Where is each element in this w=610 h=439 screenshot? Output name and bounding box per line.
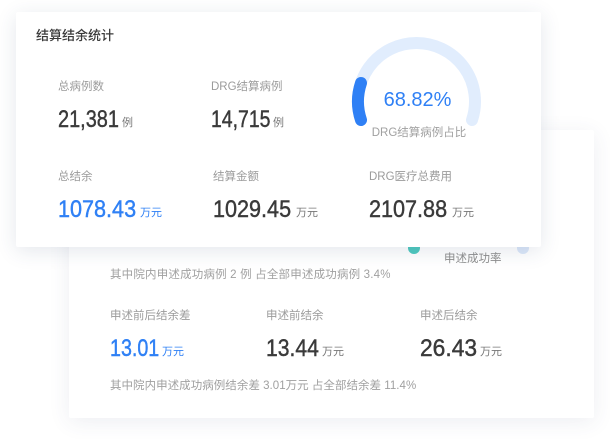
value: 21,381 bbox=[58, 106, 119, 133]
value: 13.44 bbox=[266, 335, 319, 362]
metric: total balance bbox=[58, 170, 162, 223]
unit: 万元 bbox=[322, 346, 344, 358]
metric: total DRG medical cost bbox=[369, 170, 474, 223]
unit: 万元 bbox=[480, 346, 502, 358]
label: 申述后结余 bbox=[420, 310, 478, 322]
label: 申述前结余 bbox=[266, 310, 324, 322]
label: 总病例数 bbox=[58, 81, 104, 93]
label: appeal success rate: 申述成功率 bbox=[444, 253, 502, 265]
note: in-hospital balance difference: 其中院内申述成功病例结余差 3.01万元 占全部结余差 11.4% bbox=[110, 380, 416, 392]
label: 结算金额 bbox=[213, 171, 259, 183]
value: 14,715 bbox=[211, 106, 270, 133]
panel: settlement balance statistics front card bbox=[16, 12, 541, 247]
unit: 万元 bbox=[452, 207, 474, 219]
legend dot: teal bbox=[408, 242, 420, 254]
legend dot: light blue bbox=[517, 242, 529, 254]
unit: 例 bbox=[122, 117, 133, 129]
metric: total cases bbox=[58, 80, 133, 133]
panel: appeal statistics back card bbox=[69, 130, 594, 418]
value: 1078.43 bbox=[58, 196, 136, 223]
value: 26.43 bbox=[420, 335, 477, 362]
label: 申述前后结余差 bbox=[110, 310, 190, 322]
value: 2107.88 bbox=[369, 196, 447, 223]
unit: 万元 bbox=[140, 207, 162, 219]
metric: balance after appeal bbox=[420, 309, 502, 362]
unit: 万元 bbox=[162, 346, 184, 358]
label: DRG结算病例 bbox=[211, 81, 283, 93]
unit: 例 bbox=[273, 117, 284, 129]
gauge background arc bbox=[358, 43, 475, 120]
label: 总结余 bbox=[58, 171, 92, 183]
value: 1029.45 bbox=[213, 196, 291, 223]
label: DRG医疗总费用 bbox=[369, 171, 452, 183]
chart: gauge of DRG case share bbox=[352, 37, 481, 139]
metric: DRG settled cases bbox=[211, 80, 284, 133]
gauge value arc bbox=[358, 83, 361, 120]
gauge caption: DRG结算病例占比 bbox=[372, 125, 466, 139]
metric: settlement amount bbox=[213, 170, 318, 223]
note: in-hospital appeal cases: 其中院内申述成功病例 2 例 占全部申述成功病例 3.4% bbox=[110, 269, 391, 281]
unit: 万元 bbox=[296, 207, 318, 219]
gauge value: 68.82% bbox=[384, 89, 452, 111]
metric: balance difference bbox=[110, 309, 190, 362]
metric: balance before appeal bbox=[266, 309, 344, 362]
value: 13.01 bbox=[110, 335, 159, 362]
heading: 结算结余统计 bbox=[36, 28, 114, 43]
